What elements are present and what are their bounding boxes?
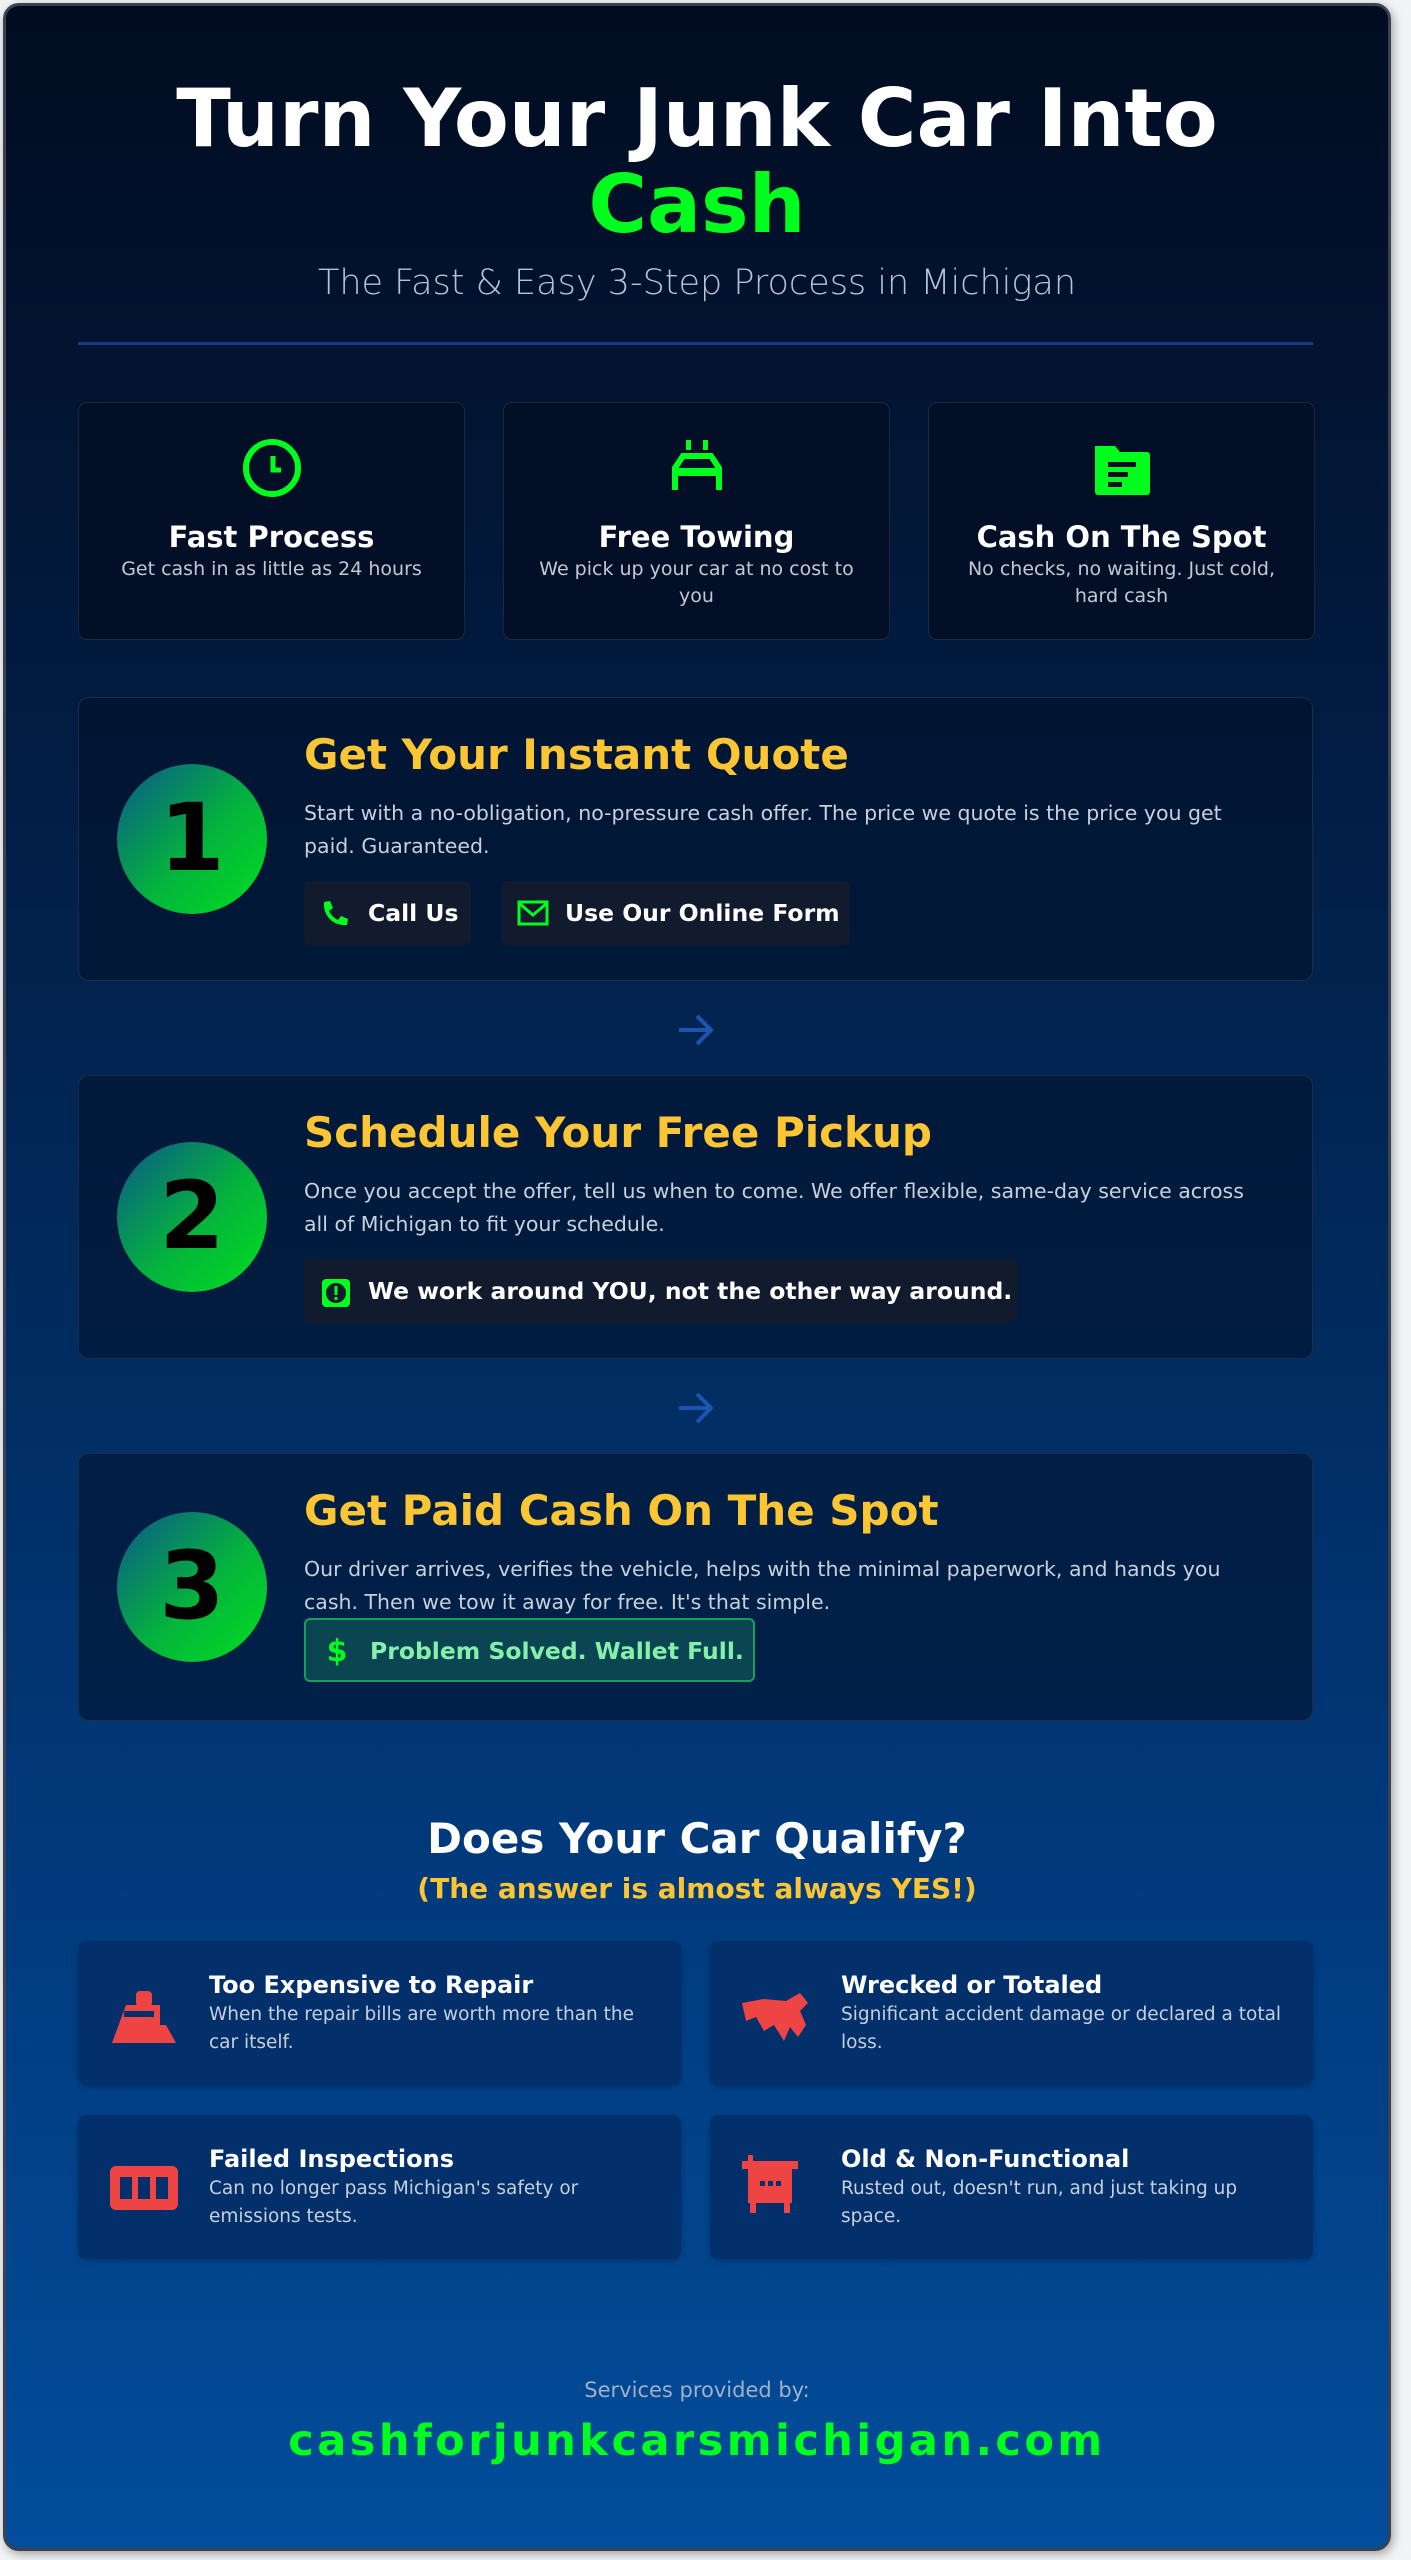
icon: clock (243, 439, 301, 497)
number 3 (117, 1512, 267, 1662)
callout pill: We work around YOU, not the other way around. (368, 1277, 1012, 1305)
panel: free towing: Free Towing (599, 520, 794, 554)
panel: failed inspections: Failed Inspections (209, 2145, 454, 2173)
heading: Get Paid Cash On The Spot (304, 1486, 939, 1535)
icon: old car (742, 2155, 798, 2213)
panel: too expensive: When the repair bills are worth more than the car itself. (209, 2004, 634, 2053)
step 3 (78, 1453, 1313, 1721)
button: call us: Call Us (368, 899, 458, 927)
footer label: Services provided by: (584, 2378, 810, 2402)
footer url: cashforjunkcarsmichigan.com (288, 2416, 1106, 2466)
callout pill: $ (327, 1634, 347, 1668)
number 2 (117, 1142, 267, 1292)
heading: Schedule Your Free Pickup (304, 1108, 932, 1157)
panel: failed inspections (78, 2115, 681, 2259)
icon: wrench/weight (112, 1991, 176, 2043)
heading: Get Your Instant Quote (304, 730, 849, 779)
callout pill: Problem Solved. Wallet Full. (370, 1637, 744, 1665)
number 2: 2 (159, 1162, 225, 1271)
icon: gauge block (110, 2166, 178, 2210)
panel: old & non-functional: Old & Non-Functional (841, 2145, 1129, 2173)
panel: old & non-functional: Rusted out, doesn't run, and just taking up space. (841, 2178, 1237, 2227)
button: online form: Use Our Online Form (565, 899, 840, 927)
subtitle: The Fast & Easy 3-Step Process in Michigan (318, 263, 1076, 303)
panel: too expensive: Too Expensive to Repair (209, 1971, 533, 1999)
callout pill (304, 1259, 1018, 1323)
callout pill (304, 1618, 755, 1682)
body text: Start with a no-obligation, no-pressure cash offer. The price we quote is the price you get paid. Guaranteed. (304, 801, 1222, 858)
button: call us (304, 881, 471, 945)
arrow (679, 1014, 714, 1046)
panel: failed inspections: Can no longer pass Michigan's safety or emissions tests. (209, 2178, 578, 2227)
step 2 (78, 1075, 1313, 1359)
arrow (679, 1392, 714, 1424)
panel: wrecked: Wrecked or Totaled (841, 1971, 1102, 1999)
panel: cash on the spot: Cash On The Spot (977, 520, 1266, 554)
panel: old & non-functional (710, 2115, 1313, 2259)
panel: fast process: Fast Process (169, 520, 374, 554)
body text: Our driver arrives, verifies the vehicle, helps with the minimal paperwork, and hands you cash. Then we tow it away for free. It's that simple. (304, 1557, 1220, 1614)
qualify subheading: (The answer is almost always YES!) (417, 1872, 977, 1905)
qualify heading: Does Your Car Qualify? (427, 1814, 967, 1863)
body text: Once you accept the offer, tell us when to come. We offer flexible, same-day service across all of Michigan to fit your schedule. (304, 1179, 1244, 1236)
number 3: 3 (159, 1532, 225, 1641)
panel: wrecked: Significant accident damage or declared a total loss. (841, 2004, 1281, 2053)
panel: wrecked (710, 1941, 1313, 2085)
number 1 (117, 764, 267, 914)
panel: fast process: Get cash in as little as 24 hours (121, 558, 422, 580)
panel: free towing (503, 402, 890, 640)
number 1: 1 (159, 784, 225, 893)
title (176, 72, 1218, 251)
step 1 (78, 697, 1313, 981)
panel: cash on the spot (928, 402, 1315, 640)
panel: cash on the spot: No checks, no waiting. Just cold, hard cash (968, 558, 1275, 607)
icon: wreck (742, 1993, 808, 2041)
panel: too expensive (78, 1941, 681, 2085)
icon: folder (1095, 446, 1150, 495)
title: Cash (588, 158, 806, 251)
title: Turn Your Junk Car Into (176, 72, 1218, 165)
icon: tow (672, 440, 722, 490)
button: online form (501, 881, 850, 945)
panel: fast process (78, 402, 465, 640)
panel: free towing: We pick up your car at no cost to you (539, 558, 854, 607)
